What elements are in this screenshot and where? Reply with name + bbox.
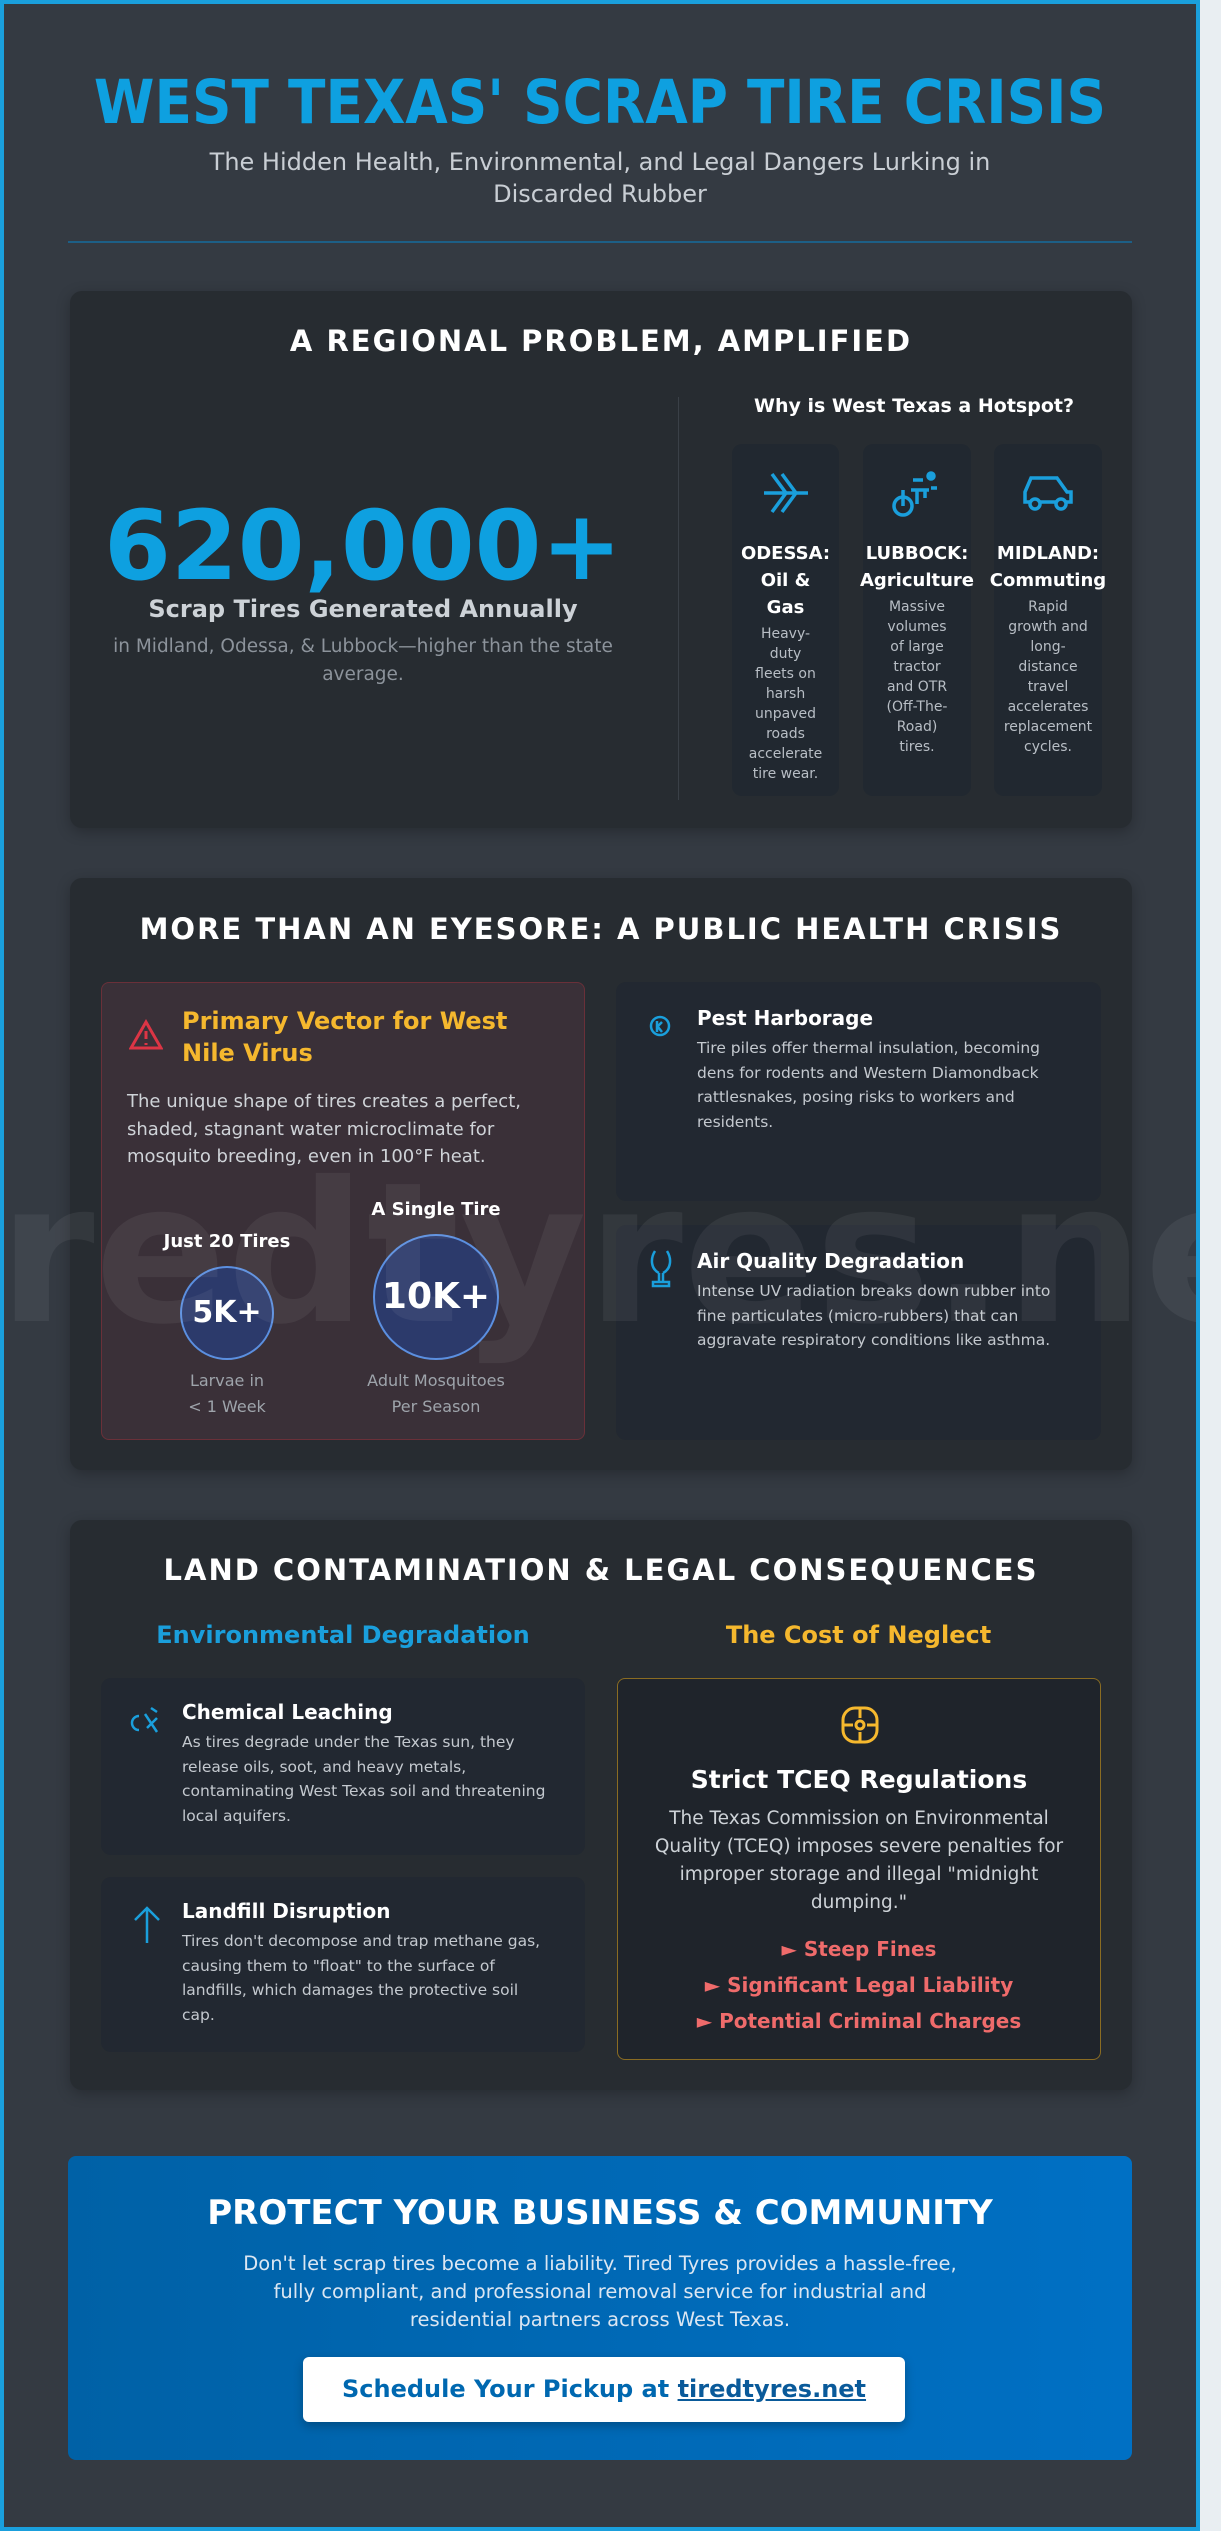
icon: car bbox=[1023, 476, 1073, 511]
heading: land: LAND CONTAMINATION & LEGAL CONSEQUENCES bbox=[164, 1553, 1038, 1587]
text: west nile: The unique shape of tires creates a perfect, shaded, stagnant water microclimate for mosquito breeding, even in 100°F heat. bbox=[127, 1091, 521, 1167]
big stat 620,000+: in Midland, Odessa, & Lubbock—higher than the state average. bbox=[113, 636, 613, 685]
penalties list: ► Significant Legal Liability bbox=[705, 1973, 1013, 1997]
card: midland bbox=[994, 444, 1102, 796]
card: west nile bbox=[101, 982, 585, 1440]
card: TCEQ: The Texas Commission on Environmental Quality (TCEQ) imposes severe penalties for improper storage and illegal "midnight dumping." bbox=[655, 1808, 1063, 1913]
card: pest harborage: Tire piles offer thermal insulation, becoming dens for rodents and Western Diamondback rattlesnakes, posing risks to workers and residents. bbox=[697, 1039, 1040, 1130]
card: odessa: Heavy- bbox=[761, 626, 810, 642]
card: odessa: fleets on bbox=[755, 666, 816, 682]
card: midland: Rapid bbox=[1028, 599, 1068, 615]
card: lubbock: (Off-The- bbox=[886, 699, 947, 715]
stat: 10K+: 10K+ bbox=[382, 1276, 490, 1317]
card: odessa: tire wear. bbox=[753, 766, 818, 782]
card: lubbock: LUBBOCK: bbox=[866, 543, 968, 564]
stat: 5K+: < 1 Week bbox=[188, 1397, 266, 1416]
heading: hotspot: Why is West Texas a Hotspot? bbox=[754, 395, 1074, 417]
subtitle: The Hidden Health, Environmental, and Legal Dangers Lurking in Discarded Rubber bbox=[210, 148, 990, 208]
stat: 10K+ bbox=[367, 1199, 505, 1416]
icon: target bbox=[842, 1706, 878, 1744]
big stat 620,000+: Scrap Tires Generated Annually bbox=[148, 595, 578, 623]
card: odessa: duty bbox=[770, 646, 801, 662]
icon: leaching bbox=[130, 1707, 158, 1733]
cta text: Don't let scrap tires become a liability. Tired Tyres provides a hassle-free, fully compliant, and professional removal service for industrial and residential partners across West Texas. bbox=[243, 2252, 957, 2331]
card: landfill: Tires don't decompose and trap methane gas, causing them to "float" to the surface of landfills, which damages the protective soil cap. bbox=[182, 1932, 540, 2024]
card: TCEQ bbox=[617, 1678, 1101, 2060]
card: chemical leaching: Chemical Leaching bbox=[182, 1700, 393, 1724]
card: midland: long- bbox=[1030, 639, 1066, 655]
card: lubbock: tires. bbox=[899, 739, 935, 755]
subheading: cost: The Cost of Neglect bbox=[726, 1621, 991, 1649]
card: lubbock: Road) bbox=[897, 719, 937, 735]
card: midland: MIDLAND: bbox=[997, 543, 1099, 564]
card: midland: accelerates bbox=[1008, 699, 1088, 715]
icon: air bbox=[650, 1250, 672, 1288]
card: landfill: Landfill Disruption bbox=[182, 1899, 390, 1923]
card: odessa: roads bbox=[766, 726, 805, 742]
stat: 10K+: A Single Tire bbox=[371, 1199, 501, 1220]
card: lubbock: volumes bbox=[887, 619, 947, 635]
card: lubbock: Agriculture bbox=[860, 570, 974, 591]
title: west nile: Primary Vector for West Nile Virus bbox=[182, 1007, 507, 1067]
icon: oil bbox=[764, 473, 808, 513]
heading: health: MORE THAN AN EYESORE: A PUBLIC HEALTH CRISIS bbox=[140, 912, 1062, 946]
card: midland: cycles. bbox=[1024, 739, 1072, 755]
heading: regional: A REGIONAL PROBLEM, AMPLIFIED bbox=[290, 324, 912, 358]
card: odessa: accelerate bbox=[749, 746, 822, 762]
card: midland: growth and bbox=[1008, 619, 1088, 635]
card: midland: replacement bbox=[1004, 719, 1092, 735]
panel: public health bbox=[70, 878, 1132, 1470]
card: lubbock: of large bbox=[890, 639, 944, 655]
icon: pest bbox=[650, 1016, 670, 1036]
icon: warning bbox=[129, 1019, 163, 1050]
card: odessa bbox=[732, 444, 839, 796]
card: TCEQ: Strict TCEQ Regulations bbox=[691, 1765, 1027, 1794]
card: odessa: harsh bbox=[766, 686, 805, 702]
stat: 5K+: Larvae in bbox=[190, 1371, 264, 1390]
card: midland: Commuting bbox=[990, 570, 1106, 591]
icon: arrow up bbox=[134, 1906, 160, 1943]
card: odessa: unpaved bbox=[755, 706, 816, 722]
penalties list bbox=[696, 1937, 1021, 2033]
card: pest harborage bbox=[616, 982, 1101, 1201]
big stat 620,000+ bbox=[104, 490, 622, 685]
stat: 5K+: 5K+ bbox=[192, 1295, 262, 1330]
card: air quality: Intense UV radiation breaks down rubber into fine particulates (micro-rubbers) that can aggravate respiratory conditions like asthma. bbox=[697, 1282, 1050, 1349]
panel: regional problem bbox=[70, 291, 1132, 828]
card: midland: travel bbox=[1028, 679, 1068, 695]
big stat 620,000+: 620,000+ bbox=[104, 490, 622, 602]
card: air quality bbox=[616, 1225, 1101, 1440]
cta button: Schedule Your Pickup at tiredtyres.net bbox=[342, 2375, 866, 2403]
penalties list: ► Potential Criminal Charges bbox=[697, 2009, 1021, 2033]
card: pest harborage: Pest Harborage bbox=[697, 1006, 873, 1030]
icon: tractor bbox=[892, 471, 937, 517]
card: lubbock: tractor bbox=[893, 659, 941, 675]
card: odessa: Gas bbox=[767, 597, 804, 618]
card: midland: distance bbox=[1018, 659, 1078, 675]
card: odessa: ODESSA: bbox=[741, 543, 830, 564]
cta heading: PROTECT YOUR BUSINESS & COMMUNITY bbox=[207, 2193, 993, 2233]
cta panel bbox=[68, 2156, 1132, 2460]
title: WEST TEXAS' SCRAP TIRE CRISIS bbox=[94, 67, 1106, 138]
card: landfill bbox=[101, 1877, 585, 2052]
card: air quality: Air Quality Degradation bbox=[697, 1249, 964, 1273]
card: lubbock bbox=[863, 444, 971, 796]
card: odessa: Oil & bbox=[761, 570, 810, 591]
subheading: environmental: Environmental Degradation bbox=[156, 1621, 530, 1649]
stat: 10K+: Per Season bbox=[392, 1397, 480, 1416]
stat: 5K+: Just 20 Tires bbox=[164, 1231, 290, 1252]
card: lubbock: and OTR bbox=[887, 679, 947, 695]
stat: 5K+ bbox=[162, 1231, 290, 1416]
card: lubbock: Massive bbox=[889, 599, 945, 615]
penalties list: ► Steep Fines bbox=[782, 1937, 936, 1961]
stat: 10K+: Adult Mosquitoes bbox=[367, 1371, 505, 1390]
card: chemical leaching: As tires degrade under the Texas sun, they release oils, soot, and heavy metals, contaminating West Texas soil and threatening local aquifers. bbox=[182, 1733, 545, 1824]
panel: land & legal bbox=[70, 1520, 1132, 2090]
cta button bbox=[303, 2357, 905, 2422]
card: chemical leaching bbox=[101, 1678, 585, 1855]
